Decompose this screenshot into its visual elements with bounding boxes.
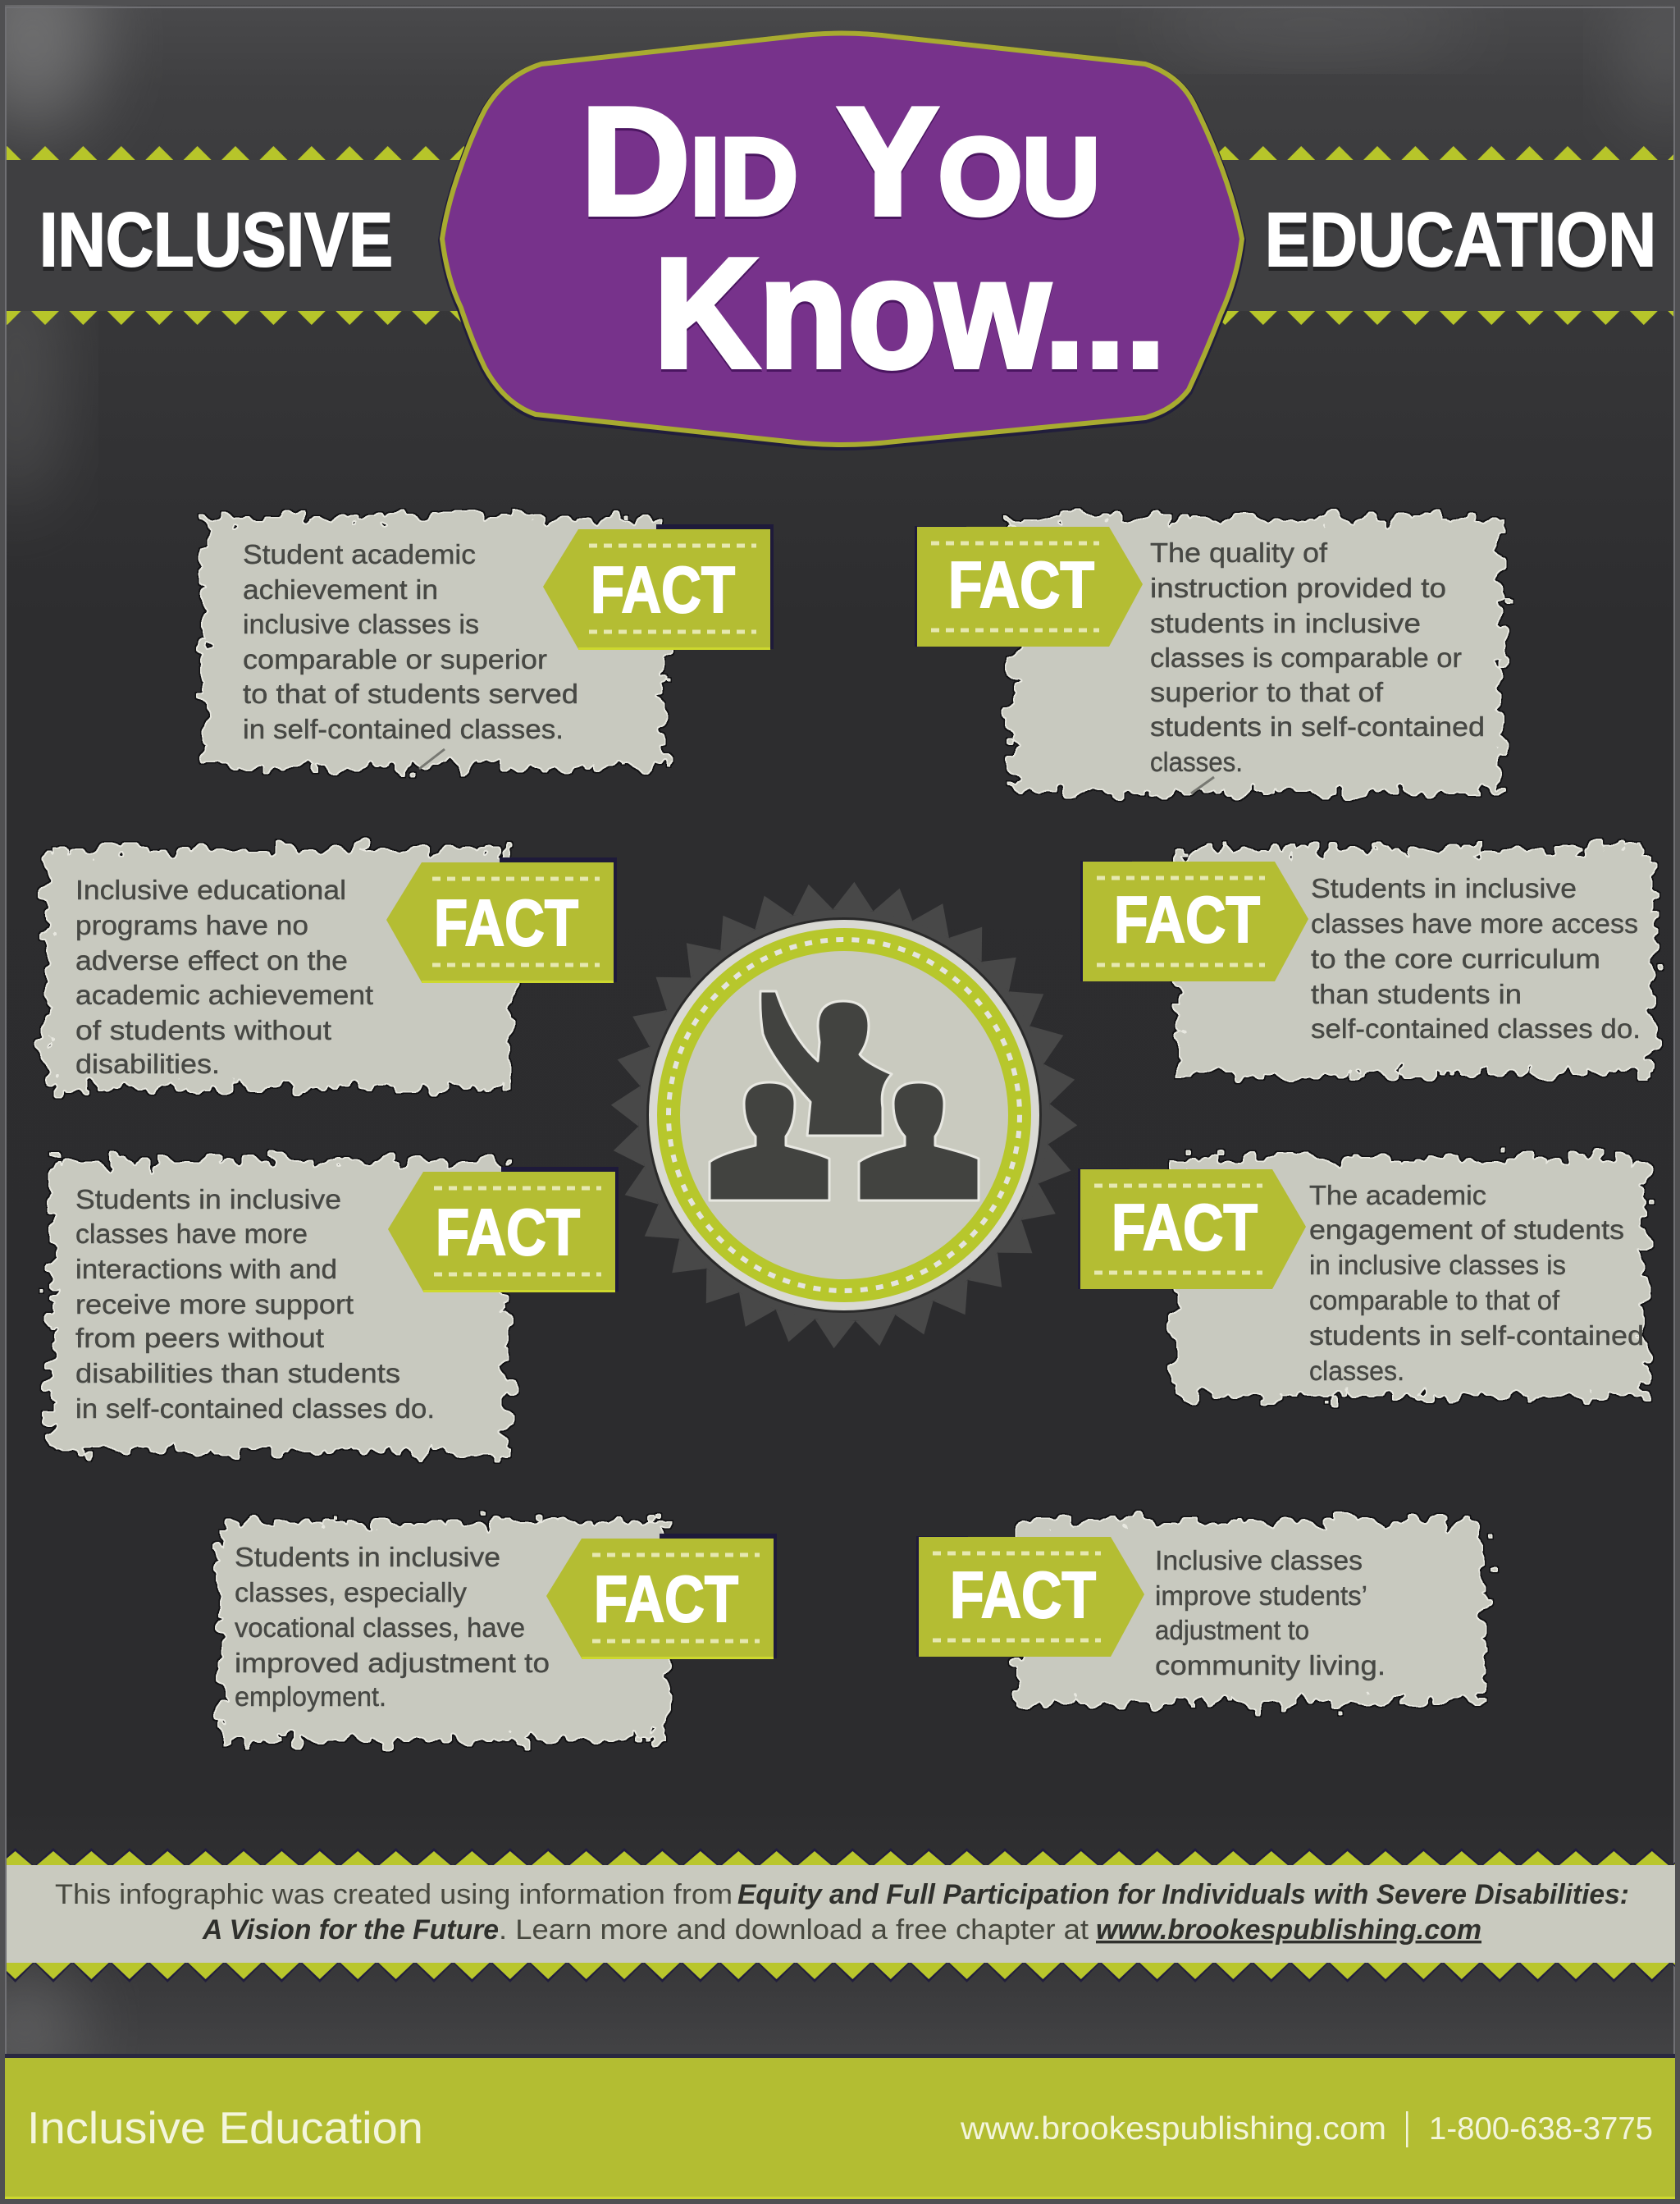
fact 3: no adverse effect: [48, 850, 617, 1086]
fact 6 tag: [1078, 1168, 1306, 1289]
fact 8 text: improve students’: [1155, 1580, 1367, 1611]
fact 5: peer interactions: [52, 1162, 619, 1452]
fact 4 text: [1311, 873, 1641, 1044]
fact 5 tag: FACT: [436, 1196, 580, 1269]
fact 6 text: in inclusive classes is: [1309, 1250, 1566, 1280]
fact 2 text: superior to that of: [1150, 677, 1384, 707]
fact 7 tag: [546, 1534, 777, 1659]
fact 5 text: [75, 1184, 435, 1424]
fact 1: academic achievement: [205, 519, 774, 769]
title line 1: DID YOU: [581, 75, 1100, 247]
fact 1 text: [243, 539, 578, 744]
fact 3 text: programs have no: [75, 910, 308, 940]
fact 3 text: adverse effect on the: [75, 945, 348, 976]
fact 3 text: Inclusive educational: [75, 875, 346, 905]
fact 2 text: students in self-contained: [1150, 711, 1485, 742]
fact 3 text: [75, 875, 373, 1079]
fact 7 text: employment.: [235, 1681, 386, 1712]
source text line 2: A Vision for the Future: [202, 1914, 499, 1946]
source ribbon: [7, 1848, 1675, 1982]
fact 4 text: self-contained classes do.: [1311, 1013, 1641, 1044]
footer divider: [1406, 2111, 1408, 2147]
fact 5 text: in self-contained classes do.: [75, 1393, 435, 1424]
fact 1 text: achievement in: [243, 574, 438, 605]
fact 8 tag: FACT: [950, 1558, 1096, 1631]
fact 3 text: of students without: [75, 1015, 331, 1045]
fact 4 tag: FACT: [1114, 883, 1260, 956]
fact 7 text: improved adjustment to: [235, 1648, 550, 1678]
source text line 1: This infographic was created using information from: [55, 1879, 733, 1910]
fact 7 text: vocational classes, have: [235, 1612, 525, 1643]
fact 1 text: Student academic: [243, 539, 476, 569]
fact 7 tag: FACT: [594, 1562, 738, 1635]
title line 2: Know...: [654, 226, 1166, 400]
fact 4: core curriculum: [1080, 850, 1653, 1072]
fact 2 tag: FACT: [948, 548, 1094, 621]
fact 4 text: to the core curriculum: [1311, 944, 1600, 974]
fact 2 text: classes is comparable or: [1150, 642, 1462, 673]
fact 2: quality of instruction: [915, 519, 1500, 793]
fact 6: academic engagement: [1078, 1159, 1644, 1395]
fact 5 text: classes have more: [75, 1219, 308, 1249]
fact 7: adjustment to employment: [221, 1523, 777, 1740]
fact 1 text: in self-contained classes.: [243, 714, 564, 744]
fact 1 tag: FACT: [591, 553, 735, 626]
fact 2 text: classes.: [1150, 747, 1243, 777]
fact 5 text: Students in inclusive: [75, 1184, 341, 1214]
fact 4 tag: [1080, 861, 1308, 981]
footer title: Inclusive Education: [27, 2102, 423, 2153]
title badge: [442, 33, 1242, 446]
fact 3 tag: FACT: [434, 886, 578, 959]
fact 6 text: comparable to that of: [1309, 1285, 1560, 1315]
heading: inclusive: INCLUSIVE: [39, 197, 393, 282]
fact 5 text: from peers without: [75, 1323, 324, 1353]
fact 8 text: [1155, 1545, 1386, 1680]
fact 1 text: comparable or superior: [243, 644, 547, 674]
fact 5 text: interactions with and: [75, 1254, 337, 1284]
emblem ring: [646, 917, 1042, 1313]
source text line 2: . Learn more and download a free chapter at: [499, 1914, 1089, 1946]
fact 6 tag: FACT: [1112, 1191, 1258, 1264]
fact 2 text: instruction provided to: [1150, 573, 1446, 603]
fact 7 text: Students in inclusive: [235, 1542, 500, 1572]
fact 6 text: engagement of students: [1309, 1214, 1624, 1245]
footer phone: 1-800-638-3775: [1429, 2111, 1653, 2147]
fact 2 text: students in inclusive: [1150, 608, 1421, 638]
fact 8 tag: [916, 1536, 1144, 1657]
fact 8 text: Inclusive classes: [1155, 1545, 1363, 1575]
fact 5 text: receive more support: [75, 1289, 354, 1319]
fact 4 text: Students in inclusive: [1311, 873, 1577, 903]
fact 5 tag: [388, 1167, 619, 1292]
fact 6 text: The academic: [1309, 1180, 1486, 1210]
fact 6 text: classes.: [1309, 1356, 1404, 1386]
footer bar: [5, 2054, 1675, 2199]
fact 8 text: adjustment to: [1155, 1615, 1309, 1645]
central emblem: [610, 881, 1078, 1349]
emblem starburst: [610, 881, 1078, 1349]
fact 7 text: classes, especially: [235, 1577, 468, 1607]
source text line 2: www.brookespublishing.com: [1096, 1914, 1481, 1946]
fact 5 text: disabilities than students: [75, 1358, 400, 1388]
fact 3 tag: [386, 857, 617, 983]
top banner band: [7, 146, 1673, 325]
fact 4 text: than students in: [1311, 979, 1522, 1009]
fact 8: community living: [916, 1522, 1483, 1702]
fact 2 text: The quality of: [1150, 537, 1328, 568]
fact 3 text: disabilities.: [75, 1049, 220, 1079]
source text line 1: Equity and Full Participation for Individuals with Severe Disabilities:: [737, 1879, 1629, 1910]
fact 6 text: students in self-contained: [1309, 1320, 1644, 1351]
fact 2 tag: [915, 526, 1143, 647]
fact 8 text: community living.: [1155, 1650, 1386, 1680]
fact 4 text: classes have more access: [1311, 908, 1638, 939]
fact 1 tag: [543, 524, 774, 650]
fact 7 text: [235, 1542, 550, 1712]
fact 2 text: [1150, 537, 1485, 777]
fact 3 text: academic achievement: [75, 980, 373, 1010]
fact 1 text: to that of students served: [243, 679, 578, 709]
fact 1 text: inclusive classes is: [243, 609, 479, 639]
fact 6 text: [1309, 1180, 1644, 1386]
footer website: www.brookespublishing.com: [960, 2111, 1386, 2147]
icon: three students, one raising a hand: [710, 991, 979, 1200]
